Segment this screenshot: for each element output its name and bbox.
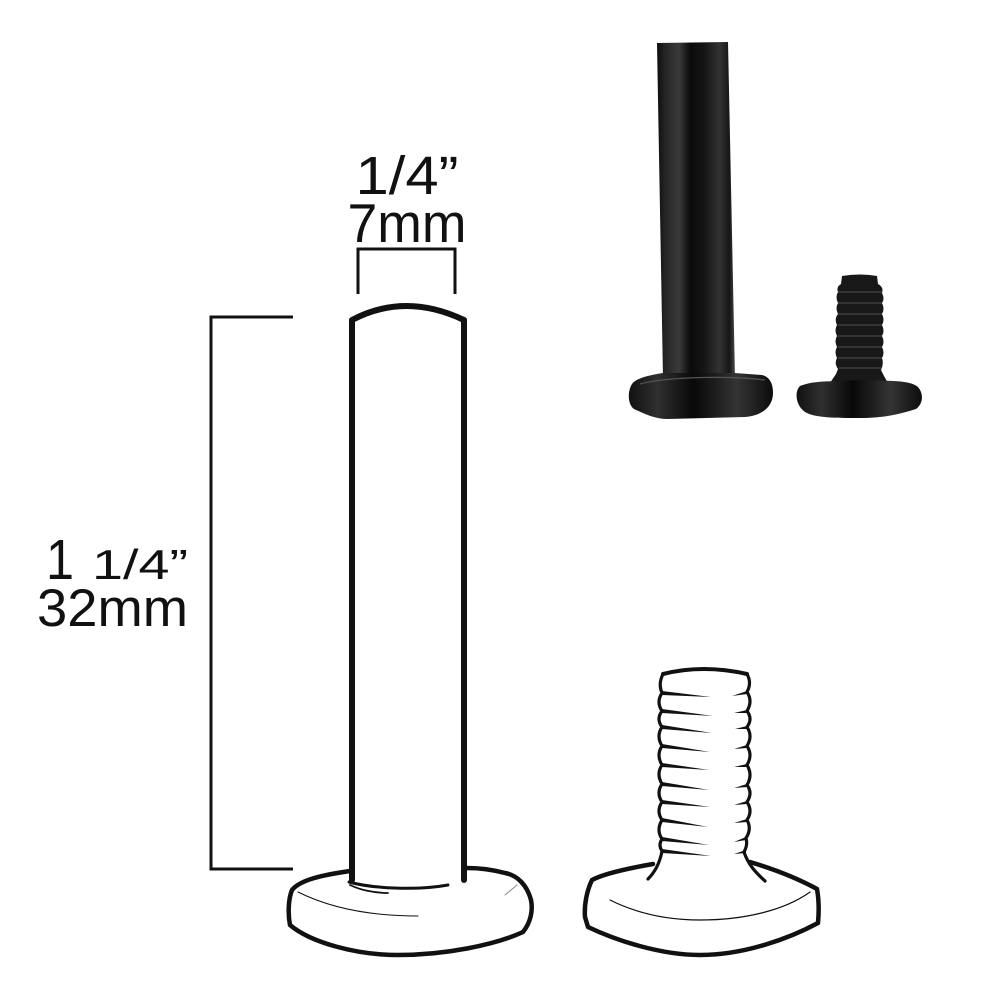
threaded shaft outline bbox=[663, 669, 747, 674]
photo: short threaded black screw bbox=[797, 274, 922, 418]
line drawing: long screw bbox=[289, 306, 532, 955]
label: length 1 1/4 inch 32mm: 32mm bbox=[37, 579, 188, 638]
photo: long black screw bbox=[629, 42, 773, 419]
long screw head details bbox=[349, 882, 448, 888]
label: diameter 1/4 inch 7mm bbox=[348, 146, 466, 254]
shank outline bbox=[352, 306, 464, 880]
threaded screw head detail bbox=[610, 892, 810, 920]
label: length 1 1/4 inch 32mm: 1 bbox=[46, 528, 74, 592]
line drawing: short threaded screw bbox=[585, 669, 819, 955]
length bracket bbox=[211, 317, 293, 869]
long screw head outline bbox=[289, 868, 532, 955]
label: length 1 1/4 inch 32mm: 1/4” bbox=[92, 541, 188, 588]
label: diameter 1/4 inch 7mm: 1/4” bbox=[356, 146, 458, 206]
label: diameter 1/4 inch 7mm: 7mm bbox=[348, 192, 466, 254]
diameter bracket bbox=[358, 249, 455, 294]
thread marks bbox=[662, 691, 747, 856]
label: length 1 1/4 inch 32mm bbox=[37, 528, 188, 638]
threaded screw head outline bbox=[585, 862, 819, 955]
